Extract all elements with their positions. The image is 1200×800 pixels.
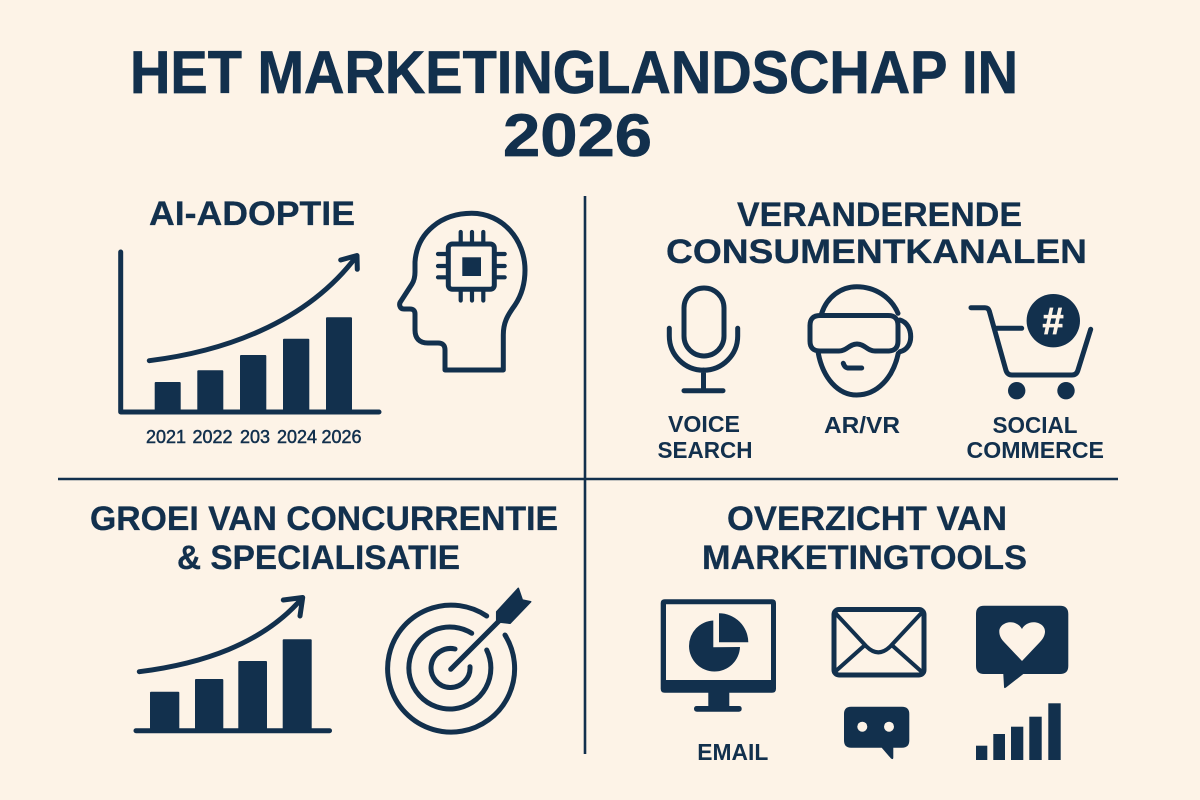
heading: veranderende consumentkanalen: CONSUMENTKANALEN [666,233,1087,271]
title: 2026 [503,102,652,169]
label: social commerce: COMMERCE [966,437,1104,463]
icon: signal bars [976,703,1061,760]
panel: AI-adoptie [121,195,525,447]
bar chart: AI adoption by year [121,252,379,447]
heading: groei van concurrentie en specialisatie [90,500,558,577]
icon: shopping cart with hashtag: # [1042,301,1064,343]
year labels: 2026 [322,427,362,447]
label: AR/VR: AR/VR [824,412,900,438]
heading: overzicht van marketingtools: MARKETINGTOOLS [702,539,1027,577]
panel: overzicht van marketingtools [661,500,1068,765]
icon: shopping cart with hashtag [971,294,1091,399]
label: email: EMAIL [697,739,768,765]
panel: groei van concurrentie en specialisatie [90,500,558,732]
label: social commerce: SOCIAL [992,412,1078,438]
year labels [146,427,362,447]
heading: veranderende consumentkanalen: VERANDERENDE [737,196,1022,234]
icon: microphone [669,288,738,391]
icon: envelope [834,610,924,675]
bar chart: growth [136,598,330,731]
label: voice search: VOICE [668,411,740,437]
year labels: 2024 [277,427,317,447]
label: voice search [658,411,752,463]
icon: VR headset [810,287,911,395]
icon: chat bubble [844,707,909,759]
label: voice search: SEARCH [658,437,752,463]
icon: speech bubble with heart [976,606,1068,688]
year labels: 2021 [146,427,186,447]
arrow: growth trend [139,598,303,672]
year labels: 203 [240,427,270,447]
year labels: 2022 [192,427,232,447]
title [130,39,1018,169]
title: HET MARKETINGLANDSCHAP IN [130,39,1018,106]
label: social commerce [966,412,1104,463]
heading: groei van concurrentie en specialisatie: GROEI VAN CONCURRENTIE [90,500,558,538]
heading: AI-adoptie: AI-ADOPTIE [149,195,355,233]
arrow: upward trend [149,256,357,361]
icon: monitor with pie chart [661,599,776,712]
heading: overzicht van marketingtools [702,500,1027,577]
icon: target with arrow [388,588,531,732]
panel: veranderende consumentkanalen [658,196,1104,463]
heading: veranderende consumentkanalen [666,196,1087,271]
icon: head with chip [400,213,525,370]
heading: overzicht van marketingtools: OVERZICHT VAN [727,500,1007,538]
heading: groei van concurrentie en specialisatie: & SPECIALISATIE [177,539,460,577]
